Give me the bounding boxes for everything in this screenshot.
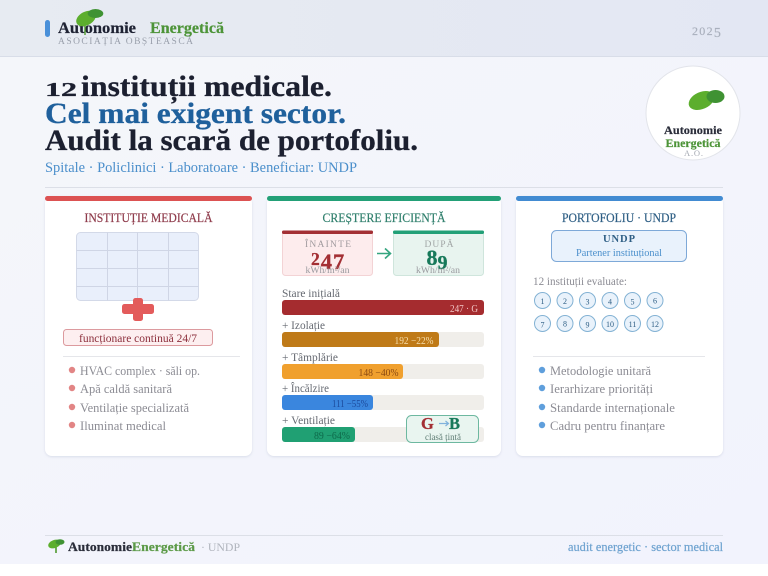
list: medical needs bbox=[69, 364, 200, 433]
title: 12 bbox=[45, 80, 77, 101]
year: 5 bbox=[714, 26, 722, 41]
partner box bbox=[552, 230, 686, 262]
label: evaluated institutions: 12 instituții evaluate: bbox=[533, 276, 627, 288]
bar: insulation: + Izolație bbox=[282, 318, 325, 332]
list: medical needs: Iluminat medical bbox=[80, 419, 166, 433]
bar: windows: + Tâmplărie bbox=[282, 350, 338, 364]
institution number circles: 1 bbox=[540, 297, 544, 306]
header logo bbox=[45, 8, 224, 47]
arrow: before to after bbox=[377, 248, 390, 258]
institution number circles: 5 bbox=[630, 298, 634, 306]
header logo: Energetică bbox=[150, 20, 224, 37]
before box: ÎNAINTE bbox=[305, 238, 351, 250]
list: portfolio benefits bbox=[539, 364, 675, 433]
bar: insulation: 192 −22% bbox=[394, 336, 434, 347]
bar: ventilation: + Ventilație bbox=[282, 413, 335, 427]
title: instituții medicale. bbox=[81, 70, 332, 104]
panel: crestere eficienta bbox=[267, 196, 501, 456]
institution number circles: 7 bbox=[540, 320, 544, 330]
building grid bbox=[76, 232, 198, 300]
bar: windows: 148 −40% bbox=[358, 368, 399, 379]
heading: institutie medicala: INSTITUȚIE MEDICALĂ bbox=[84, 210, 213, 225]
footer logo: Autonomie bbox=[68, 540, 132, 554]
institution number circles: 12 bbox=[651, 320, 659, 329]
callout: target class bbox=[406, 414, 478, 443]
footer logo: Energetică bbox=[132, 540, 196, 554]
panel: portofoliu undp bbox=[516, 196, 723, 456]
institution number circles: 9 bbox=[586, 320, 590, 330]
footer logo bbox=[47, 538, 240, 554]
before box: 47 bbox=[321, 249, 345, 274]
bar: heating bbox=[282, 381, 484, 410]
callout: target class: G bbox=[421, 414, 434, 433]
institution number circles: 10 bbox=[606, 320, 614, 329]
after box: 8 bbox=[426, 245, 438, 270]
header band bbox=[0, 0, 768, 56]
bar: initial state: 247 · G bbox=[450, 304, 478, 315]
panel: institutie medicala bbox=[45, 196, 252, 456]
bar: heating: + Încălzire bbox=[282, 381, 329, 395]
list: medical needs: Ventilație specializată bbox=[80, 401, 189, 415]
round logo badge: Autonomie bbox=[664, 123, 723, 137]
before box bbox=[282, 230, 373, 276]
institution number circles: 6 bbox=[653, 296, 657, 306]
year: 202 bbox=[692, 24, 714, 38]
after box: 9 bbox=[438, 252, 448, 274]
institution number circles: 3 bbox=[586, 298, 590, 306]
bar: initial state: Stare inițială bbox=[282, 286, 341, 300]
institution number circles: 4 bbox=[608, 298, 612, 306]
institution number circles bbox=[534, 292, 663, 332]
institution number circles: 2 bbox=[563, 297, 567, 306]
before box: kWh/m²/an bbox=[306, 266, 350, 276]
list: portfolio benefits: Standarde internaționale bbox=[550, 401, 675, 415]
list: portfolio benefits: Metodologie unitară bbox=[550, 364, 651, 378]
bar chart: efficiency steps bbox=[282, 286, 484, 442]
badge: continuous operation: funcționare continuă 24/7 bbox=[79, 333, 197, 345]
icon: medical cross bbox=[122, 298, 154, 321]
bar: ventilation bbox=[282, 413, 484, 442]
partner box: Partener instituțional bbox=[576, 248, 662, 259]
round logo badge: A.O. bbox=[684, 148, 703, 158]
after box: DUPĂ bbox=[424, 238, 454, 250]
footer note: audit energetic · sector medical bbox=[568, 540, 724, 554]
after box bbox=[393, 230, 484, 276]
bar: insulation bbox=[282, 318, 484, 347]
footer logo: · UNDP bbox=[201, 542, 240, 554]
bar: heating: 111 −55% bbox=[332, 399, 368, 410]
callout: target class: clasă țintă bbox=[425, 433, 462, 443]
heading: crestere eficienta: CREȘTERE EFICIENȚĂ bbox=[322, 210, 446, 225]
callout: target class: B bbox=[449, 414, 460, 433]
after box: kWh/m²/an bbox=[416, 266, 460, 276]
subtitle: Spitale · Policlinici · Laboratoare · Beneficiar: UNDP bbox=[45, 160, 357, 176]
round logo badge: Energetică bbox=[666, 136, 720, 150]
footer bbox=[45, 536, 724, 554]
bar: windows bbox=[282, 350, 484, 379]
round logo badge bbox=[646, 66, 740, 160]
institution number circles: 11 bbox=[629, 320, 636, 329]
bar: initial state bbox=[282, 286, 484, 315]
before box: 2 bbox=[311, 249, 321, 269]
heading: portofoliu: PORTOFOLIU · UNDP bbox=[562, 210, 676, 225]
title: Cel mai exigent sector. bbox=[45, 97, 346, 130]
list: medical needs: HVAC complex · săli op. bbox=[80, 364, 200, 378]
partner box: UNDP bbox=[603, 234, 636, 245]
title bbox=[45, 70, 418, 157]
header logo: Autonomie bbox=[58, 20, 136, 37]
title: Audit la scară de portofoliu. bbox=[45, 124, 418, 157]
institution number circles: 8 bbox=[563, 320, 567, 328]
badge: continuous operation bbox=[64, 330, 212, 346]
header logo: ASOCIAȚIA OBȘTEASCĂ bbox=[58, 35, 193, 47]
list: medical needs: Apă caldă sanitară bbox=[80, 382, 172, 396]
list: portfolio benefits: Ierarhizare priorități bbox=[550, 382, 653, 396]
list: portfolio benefits: Cadru pentru finanțare bbox=[550, 419, 665, 433]
bar: ventilation: 89 −64% bbox=[314, 431, 350, 442]
